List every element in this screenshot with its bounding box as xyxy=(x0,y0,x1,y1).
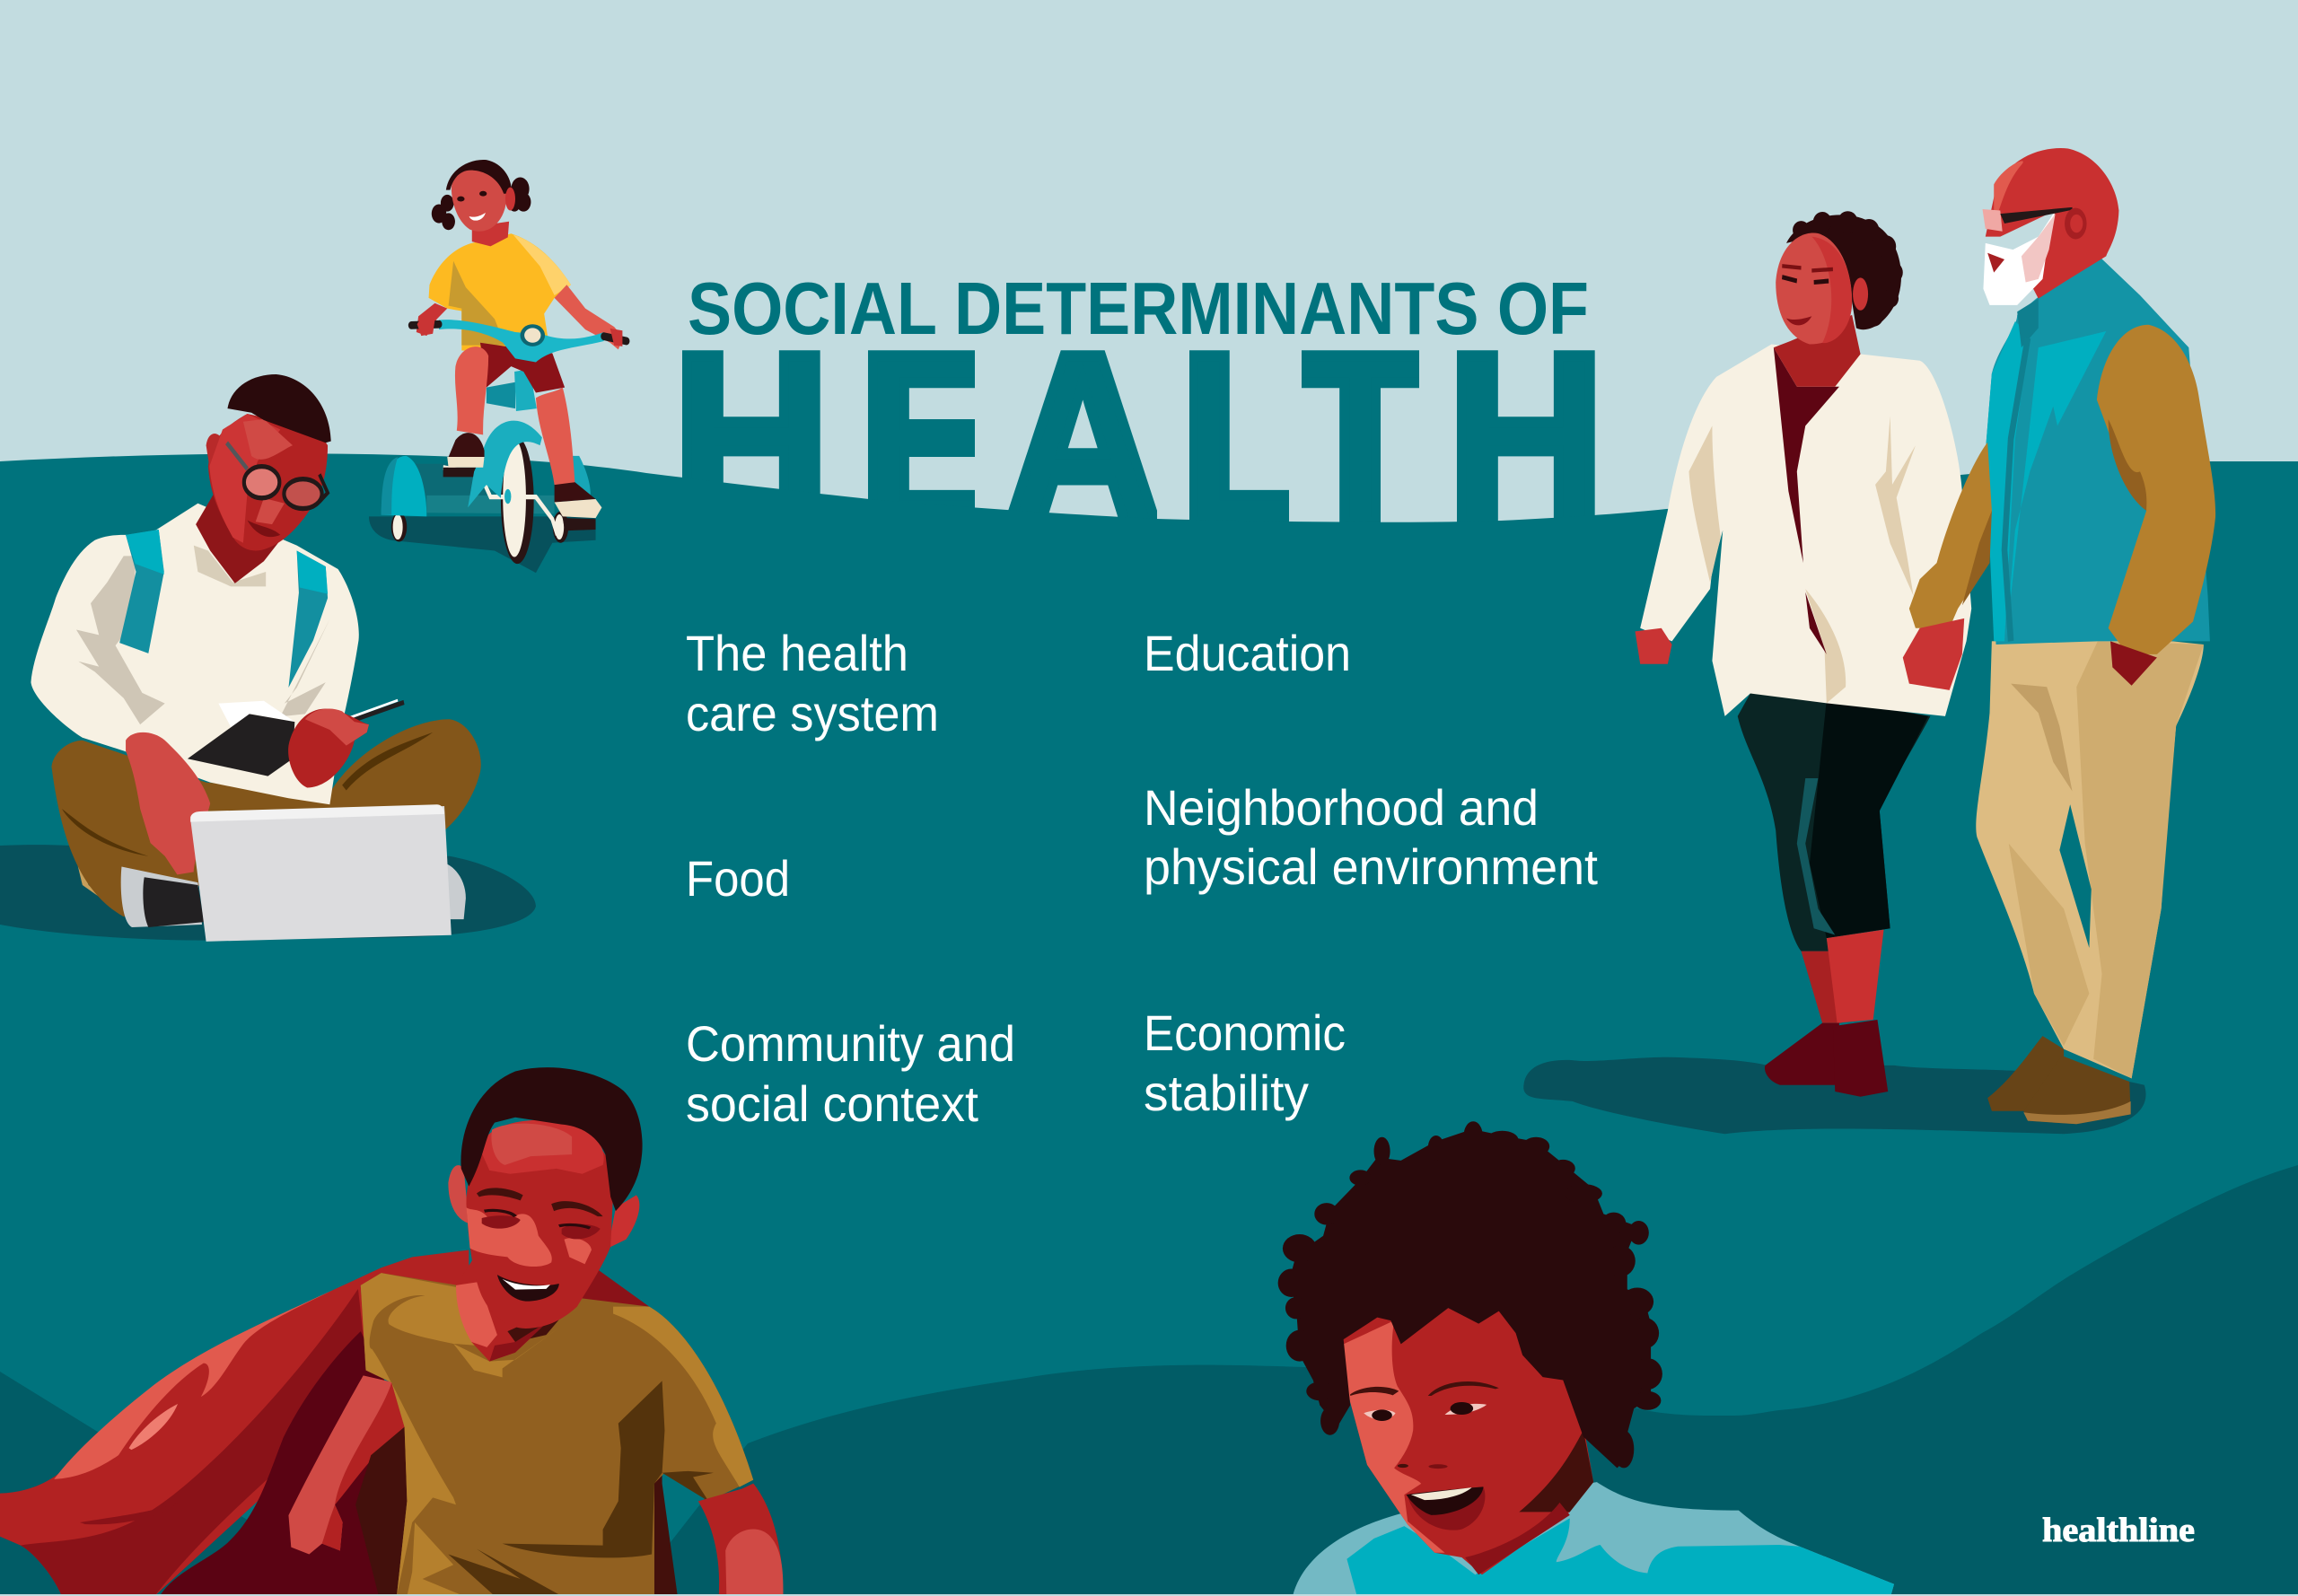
list: right column xyxy=(1144,625,1598,1121)
item: economic stability: stability xyxy=(1144,1065,1309,1121)
item: community and social context xyxy=(686,1015,1015,1132)
teal ground xyxy=(0,453,2298,1596)
dark foreground hill left xyxy=(0,1372,377,1596)
item: community and social context: social context xyxy=(686,1075,978,1132)
illustration: student with laptop xyxy=(0,374,536,942)
item: economic stability: Economic xyxy=(1144,1004,1346,1061)
t-shirt xyxy=(361,1273,753,1596)
neck xyxy=(456,1253,598,1362)
item: health care system xyxy=(686,625,939,741)
item: education: Education xyxy=(1144,625,1351,681)
item: economic stability xyxy=(1144,1004,1346,1121)
item: health care system: The health xyxy=(686,625,908,681)
woman xyxy=(1636,211,1971,1097)
curly hair xyxy=(1278,1121,1662,1468)
shadow under couple xyxy=(1523,1057,2146,1134)
item: food: Food xyxy=(686,850,790,907)
logo: healthline: healthline xyxy=(2042,1512,2195,1549)
man xyxy=(1903,148,2215,1124)
item: neighborhood and physical environment: Neighborhood and xyxy=(1144,779,1539,836)
right arm xyxy=(698,1484,783,1596)
list: left column xyxy=(686,625,1015,1132)
blue shirt xyxy=(1293,1482,1894,1596)
item: neighborhood and physical environment xyxy=(1144,779,1598,895)
head xyxy=(448,1067,643,1329)
item: neighborhood and physical environment: physical environment xyxy=(1144,838,1598,895)
illustration: girl with curly hair xyxy=(1278,1121,1894,1596)
cape xyxy=(0,1250,649,1596)
illustration: girl on tricycle xyxy=(369,160,627,573)
face xyxy=(1340,1308,1593,1574)
title: HEALTH: HEALTH xyxy=(672,303,1605,574)
heading: social determinants of: SOCIAL DETERMINANTS OF xyxy=(688,267,1589,350)
illustration: boy with red cape xyxy=(0,1067,783,1596)
item: health care system: care system xyxy=(686,685,939,741)
illustration: older couple holding hands xyxy=(1523,148,2215,1134)
item: community and social context: Community and xyxy=(686,1015,1015,1072)
dark foreground hill right xyxy=(628,1165,2298,1596)
